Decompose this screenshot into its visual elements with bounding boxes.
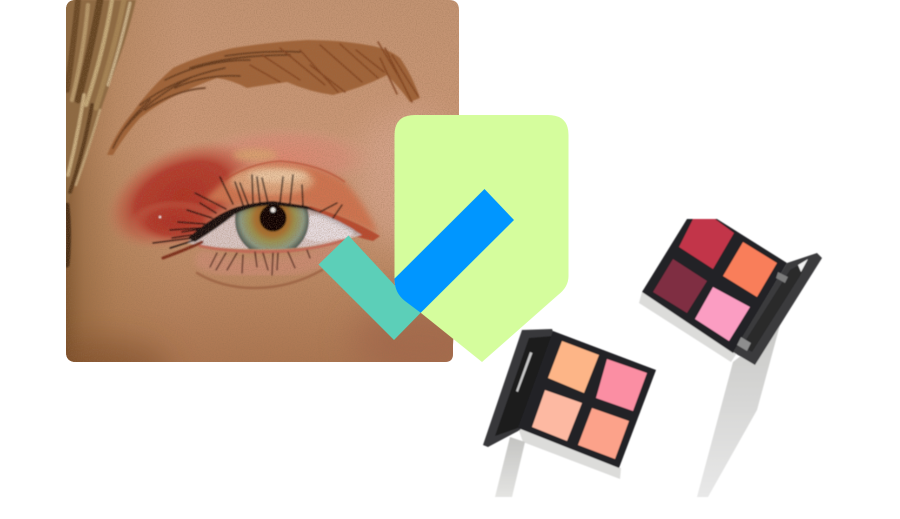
compact case bbox=[518, 331, 656, 468]
photo grain bbox=[60, 0, 465, 365]
lower lashes bbox=[210, 250, 310, 275]
skin base bbox=[66, 0, 459, 362]
berry and pink pans bbox=[653, 219, 777, 341]
palette: coral and peach compact, lower left bbox=[483, 329, 656, 497]
shadow of compact bbox=[495, 428, 621, 497]
red eyeshadow wash bbox=[112, 134, 348, 248]
gold eyelid bbox=[205, 149, 380, 241]
makeup and features, softened bbox=[60, 0, 420, 288]
shield: lime badge bbox=[394, 115, 568, 362]
check mark: short teal arm bbox=[318, 236, 420, 340]
hair strands bbox=[60, 0, 136, 265]
lower lid and crease bbox=[163, 240, 345, 288]
shadow of compact bbox=[639, 292, 780, 497]
coral shadow pans bbox=[532, 341, 647, 459]
upper eyelashes bbox=[153, 175, 342, 248]
compact lid bbox=[483, 329, 555, 447]
eyeball and iris bbox=[186, 204, 362, 250]
check mark: long blue arm bbox=[394, 189, 514, 313]
photo: close-up of eye with red and gold eyeshadow bbox=[66, 0, 459, 362]
palette: berry and pink compact, upper right bbox=[639, 219, 822, 497]
compact case bbox=[642, 219, 787, 353]
compact lid bbox=[733, 253, 822, 365]
eyebrow bbox=[107, 40, 420, 155]
